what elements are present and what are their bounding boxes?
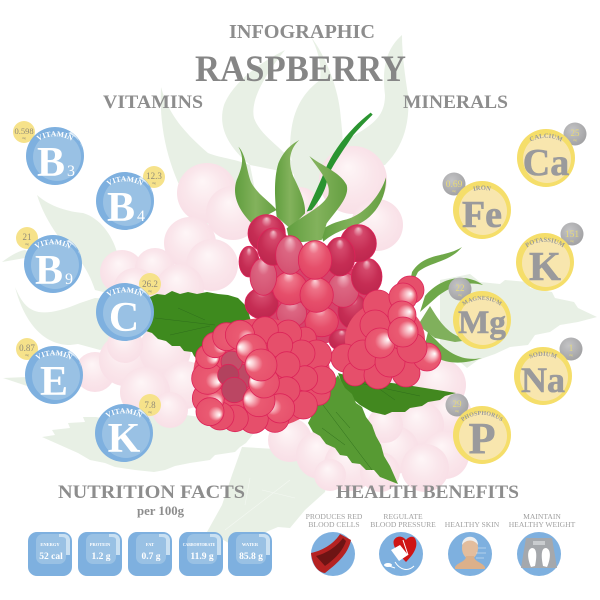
vitamin B4: 12.3: [146, 171, 162, 181]
background: pale raspberries: [75, 146, 472, 492]
nutrition: water: [228, 532, 272, 576]
mineral K: POTASSIUM: [524, 238, 566, 248]
nutrition: carbohydrate: [179, 532, 223, 576]
heading: minerals: MINERALS: [403, 92, 508, 113]
raspberry: main: [239, 215, 382, 351]
vitamin B3: 3: [67, 163, 75, 180]
benefit: healthy skin: HEALTHY SKIN: [445, 520, 500, 529]
leaf: bottom: [308, 375, 398, 484]
vitamin B3: [13, 121, 84, 186]
mineral P: PHOSPHORUS: [460, 410, 504, 422]
mineral Ca: CALCIUM: [530, 134, 563, 142]
vitamin E: 0.87: [19, 343, 35, 353]
vitamin C: VITAMIN: [106, 287, 144, 296]
mineral Fe: IRON: [473, 186, 492, 191]
nutrition: fat: FAT: [146, 542, 154, 547]
nutrition: energy: [28, 532, 72, 576]
vitamin K: K: [108, 416, 141, 462]
benefit: blood pressure: [370, 512, 436, 576]
vitamin B9: [16, 227, 82, 294]
mineral Mg: mg: [458, 293, 462, 297]
benefit: blood pressure: REGULATE: [383, 512, 423, 521]
sepals on small berry: [408, 247, 483, 363]
nutrition: protein: PROTEIN: [90, 542, 111, 547]
benefit: healthy weight: [509, 512, 576, 576]
leaf: left: [143, 291, 252, 362]
text: per 100g: per 100g: [137, 504, 185, 518]
mineral Mg: Mg: [458, 305, 506, 341]
vitamin B3: VITAMIN: [36, 131, 74, 140]
title: raspberry: RASPBERRY: [195, 49, 406, 90]
vitamin B4: [96, 166, 165, 231]
vitamin E: [16, 338, 83, 405]
mineral K: [516, 222, 584, 291]
benefit: healthy skin: [445, 520, 500, 576]
mineral Mg: 22: [456, 283, 464, 293]
vitamin B9: B: [35, 248, 63, 294]
vitamin B3: 0.598: [14, 126, 34, 136]
vitamin E: VITAMIN: [35, 350, 73, 360]
vitamin B4: 4: [137, 208, 145, 225]
mineral Fe: [442, 172, 511, 239]
vitamin B4: mg: [152, 181, 156, 185]
nutrition: fat: 0.7 g: [142, 552, 161, 562]
heading: vitamins: VITAMINS: [103, 92, 203, 113]
nutrition: fat: [128, 532, 172, 576]
vitamin C: 26.2: [142, 279, 158, 289]
nutrition: protein: 1.2 g: [92, 552, 111, 562]
mineral Ca: 25: [570, 128, 580, 138]
vitamin B9: 9: [65, 271, 73, 288]
mineral Ca: [517, 122, 586, 187]
mineral K: mg: [570, 239, 574, 243]
benefit: red blood cells: PRODUCES RED: [306, 512, 363, 521]
vitamin B9: VITAMIN: [34, 239, 72, 248]
vitamin B9: 21: [22, 232, 32, 242]
vitamin B4: VITAMIN: [106, 176, 144, 186]
vitamin K: [95, 394, 161, 462]
mineral Na: 1: [569, 343, 573, 353]
mineral K: 151: [565, 230, 579, 240]
mineral Na: SODIUM: [529, 352, 558, 358]
benefit: healthy weight: MAINTAIN: [523, 512, 561, 521]
mineral Fe: Fe: [462, 194, 502, 236]
nutrition: carbohydrate: 11.9 g: [190, 552, 214, 562]
mineral P: mg: [455, 409, 459, 413]
nutrition: energy: 52 cal: [39, 552, 63, 562]
mineral P: 29: [452, 399, 462, 409]
vitamin B9: mg: [25, 242, 29, 246]
benefit: healthy weight: HEALTHY WEIGHT: [509, 520, 576, 529]
nutrition: carbohydrate: CARBOHYDRATE: [183, 543, 216, 547]
heading: nutrition facts: NUTRITION FACTS: [58, 482, 245, 503]
title: infographic: INFOGRAPHIC: [229, 21, 375, 43]
vitamin C: C: [109, 295, 139, 341]
mineral P: P: [469, 414, 495, 463]
benefit: red blood cells: BLOOD CELLS: [308, 520, 360, 529]
mineral Na: Na: [521, 360, 565, 400]
mineral Fe: 0.69: [446, 180, 463, 190]
benefit: red blood cells: [306, 512, 363, 576]
nutrition: energy: ENERGY: [40, 542, 60, 547]
nutrition: water: 85.8 g: [239, 552, 263, 562]
mineral K: K: [529, 243, 561, 289]
mineral Ca: Ca: [523, 142, 569, 184]
vitamin B3: B: [37, 140, 65, 186]
mineral Na: [514, 338, 582, 405]
vitamin B3: mg: [22, 136, 26, 140]
mineral P: [446, 394, 511, 464]
stem and sepals on main berry: [235, 113, 386, 243]
mineral Ca: mg: [573, 138, 577, 142]
vitamin C: [96, 273, 161, 341]
vitamin E: mg: [25, 353, 29, 357]
mineral Mg: [448, 278, 511, 349]
mineral Mg: MAGNESIUM: [462, 296, 502, 306]
vitamin E: E: [40, 359, 68, 405]
vitamin K: VITAMIN: [105, 408, 143, 418]
leaf: right: [338, 373, 456, 415]
nutrition: protein: [78, 532, 122, 576]
raspberry: small right: [331, 276, 441, 389]
vitamin K: 7.8: [144, 400, 156, 410]
vitamin B4: B: [107, 185, 135, 231]
nutrition: water: WATER: [242, 542, 259, 547]
vitamin K: mg: [148, 410, 152, 414]
vitamin C: mg: [148, 289, 152, 293]
raspberry: front: [192, 317, 336, 433]
mineral Na: mg: [569, 353, 573, 357]
mineral Fe: mg: [452, 189, 456, 193]
benefit: blood pressure: BLOOD PRESSURE: [370, 520, 436, 529]
heading: health benefits: HEALTH BENEFITS: [336, 482, 519, 503]
